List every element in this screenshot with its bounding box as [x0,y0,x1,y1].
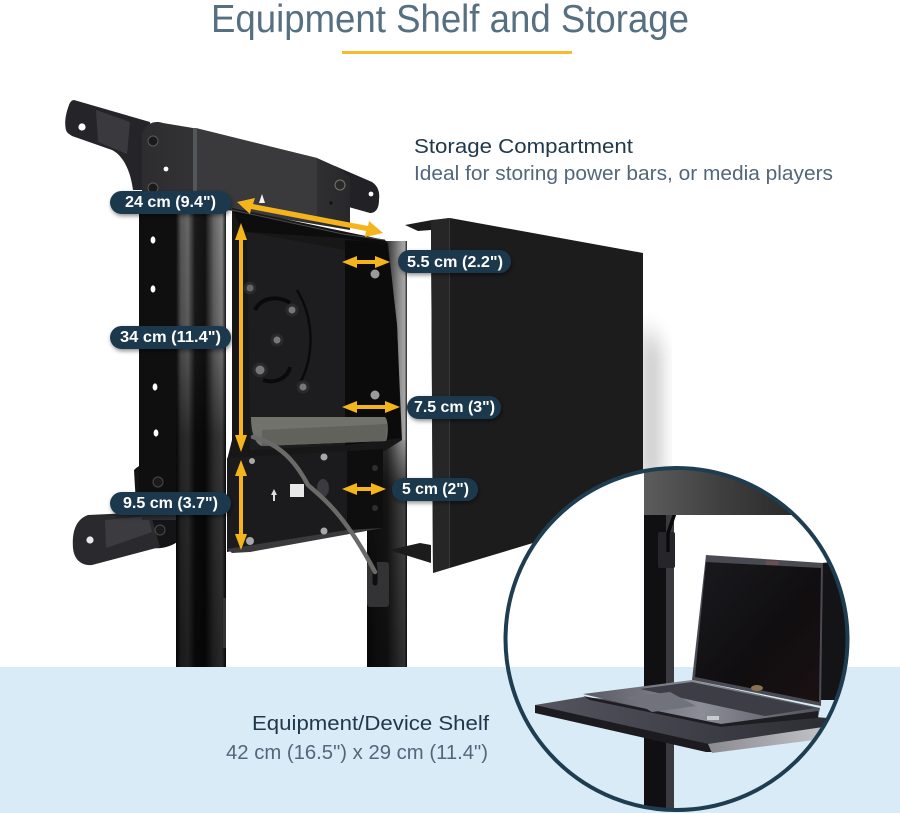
equipment shelf text [226,712,489,764]
storage compartment text: Storage Compartment [414,135,633,158]
power cable [253,437,375,583]
removable compartment door [389,218,643,573]
label: 5 cm [392,478,478,501]
rear mounting plate [139,122,350,520]
bottom left mounting tab [73,462,180,565]
label: 24 cm [110,191,231,214]
compartment body [227,208,402,460]
label: 24 cm: 24 cm (9.4") [125,194,216,211]
top right mounting tab [335,166,379,213]
laptop screen [692,555,823,706]
shelf top [535,697,850,753]
lens ring [506,468,848,810]
arrow: height 9.5 cm [235,460,247,550]
laptop lid back [821,562,846,700]
lens compartment underside [644,470,792,515]
right pole [367,241,407,667]
arrow: depth 5.5 cm [342,256,390,268]
panel shadow [644,320,658,480]
laptop base [583,680,820,727]
arrow: depth 7.5 cm [342,401,400,413]
power bar [251,417,388,446]
dimension arrows [235,198,400,550]
lens pole [644,500,676,813]
storage compartment text: Ideal for storing power bars, or media players [414,162,833,185]
storage compartment text [414,135,833,185]
plate holes and bolts [148,136,345,535]
label: 34 cm [110,326,231,349]
blue floor band [0,667,900,813]
stand with storage compartment [65,100,407,667]
arrow: depth 5 cm [342,483,386,495]
title underline [342,51,572,54]
equipment shelf text: 42 cm (16.5") x 29 cm (11.4") [226,741,488,764]
label: 9.5 cm [110,492,231,515]
label: 5.5 cm [398,250,511,273]
top left mounting tab [65,100,152,190]
label: 7.5 cm: 7.5 cm (3") [414,399,495,416]
lens floor band [510,667,834,808]
arrow: height 34 cm [235,223,247,452]
equipment shelf text: Equipment/Device Shelf [252,712,489,735]
label: 5.5 cm: 5.5 cm (2.2") [407,254,503,271]
lower bracket [227,449,383,553]
left pole [176,205,226,667]
shelf detail lens [504,466,850,812]
label: 5 cm: 5 cm (2") [402,481,469,498]
arrow: width 24 cm [237,198,383,237]
label: 7.5 cm [407,396,501,419]
label: 34 cm: 34 cm (11.4") [120,329,221,346]
compartment bolts [245,270,380,400]
label: 9.5 cm: 9.5 cm (3.7") [123,495,218,512]
lens background [506,468,848,810]
